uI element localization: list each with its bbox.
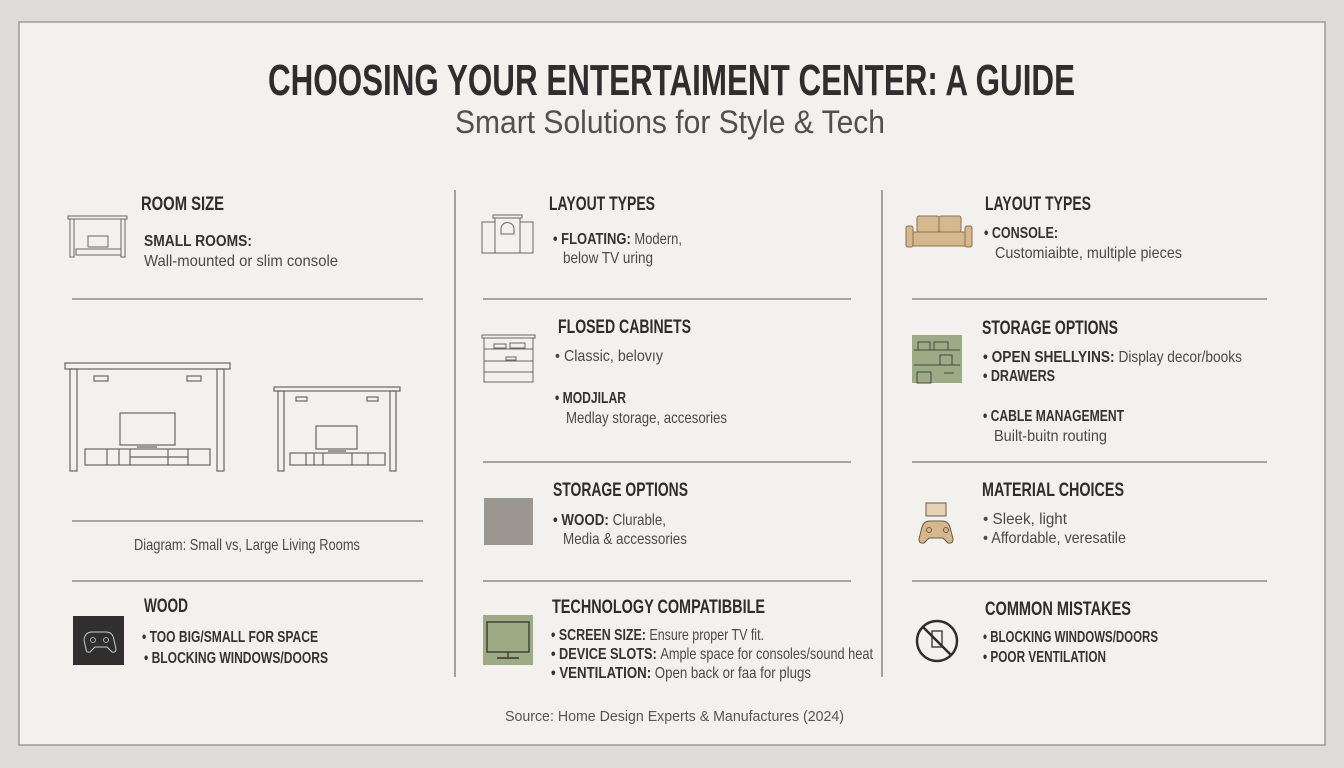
panel: layout types (col 2): • FLOATING: Modern,: [553, 231, 682, 248]
panel: storage options (col 3): • CABLE MANAGEMENT: [983, 408, 1124, 425]
panel: common mistakes: COMMON MISTAKES: [985, 599, 1131, 620]
icon: tan gamepad: [919, 503, 953, 543]
footer: source: Source: Home Design Experts & Manufactures (2024): [505, 708, 844, 725]
panel: material choices: • Sleek, light: [983, 511, 1068, 528]
panel: storage options (col 2): [484, 480, 688, 548]
icon: small room: [68, 216, 127, 257]
panel: flosed cabinets: • Classic, belovıy: [555, 348, 663, 365]
panel: common mistakes: [917, 599, 1158, 666]
icon: cabinet: [482, 335, 535, 382]
panel: room size: Wall-mounted or slim console: [144, 253, 338, 270]
icon: sofa: [906, 216, 972, 247]
panel: layout types (col 3): Customiaibte, multiple pieces: [995, 245, 1182, 262]
panel: wood: [73, 596, 328, 667]
panel: flosed cabinets: [482, 317, 727, 427]
panel: technology: • DEVICE SLOTS: Ample space for consoles/sound heat: [551, 646, 873, 663]
panel: layout types (col 3): [906, 194, 1182, 262]
icon: wall unit: [482, 215, 533, 253]
panel: room size: [68, 194, 338, 270]
panel: material choices: • Affordable, veresatile: [983, 530, 1126, 547]
panel: storage options (col 3): • DRAWERS: [983, 368, 1055, 385]
panel: technology: [483, 597, 873, 682]
panel: layout types (col 2): below TV uring: [563, 250, 653, 267]
icon: tv: [483, 615, 533, 665]
panel: technology: TECHNOLOGY COMPATIBBILE: [552, 597, 765, 618]
panel: flosed cabinets: • MODJILAR: [555, 390, 626, 407]
panel: layout types (col 3): LAYOUT TYPES: [985, 194, 1091, 215]
panel: material choices: [919, 480, 1126, 547]
panel: wood: • BLOCKING WINDOWS/DOORS: [144, 650, 328, 667]
panel: flosed cabinets: FLOSED CABINETS: [558, 317, 691, 338]
caption: diagram: Diagram: Small vs, Large Living Rooms: [134, 537, 360, 554]
panel: technology: • SCREEN SIZE: Ensure proper TV fit.: [551, 627, 764, 644]
chart: small vs large room diagram: [65, 363, 400, 471]
panel: layout types (col 2): [482, 194, 682, 267]
icon: dark gamepad: [73, 616, 124, 665]
subtitle: Smart Solutions for Style & Tech: [455, 104, 885, 140]
panel: layout types (col 3): • CONSOLE:: [984, 225, 1058, 242]
panel: material choices: MATERIAL CHOICES: [982, 480, 1124, 501]
panel: technology: • VENTILATION: Open back or faa for plugs: [551, 665, 811, 682]
panel: common mistakes: • BLOCKING WINDOWS/DOORS: [983, 629, 1158, 646]
panel: storage options (col 2): • WOOD: Clurable,: [553, 512, 666, 529]
panel: common mistakes: • POOR VENTILATION: [983, 649, 1106, 666]
panel: storage options (col 3): [912, 318, 1242, 445]
heading: wood: WOOD: [144, 596, 188, 617]
text: small rooms: SMALL ROOMS:: [144, 233, 252, 250]
panel: storage options (col 2): Media & accessories: [563, 531, 687, 548]
panel: storage options (col 3): • OPEN SHELLYINS: Display decor/books: [983, 349, 1242, 366]
icon: no symbol: [917, 621, 957, 661]
heading: LAYOUT TYPES: [549, 194, 655, 215]
panel: storage options (col 3): STORAGE OPTIONS: [982, 318, 1118, 339]
panel: storage options (col 2): STORAGE OPTIONS: [553, 480, 688, 501]
panel: storage options (col 3): Built-buitn routing: [994, 428, 1107, 445]
panel: flosed cabinets: Medlay storage, accesories: [566, 410, 727, 427]
text: wood bullets: • TOO BIG/SMALL FOR SPACE: [142, 629, 318, 646]
icon: wood swatch: [484, 498, 533, 545]
heading: room size: ROOM SIZE: [141, 194, 224, 215]
icon: shelves: [912, 335, 962, 383]
